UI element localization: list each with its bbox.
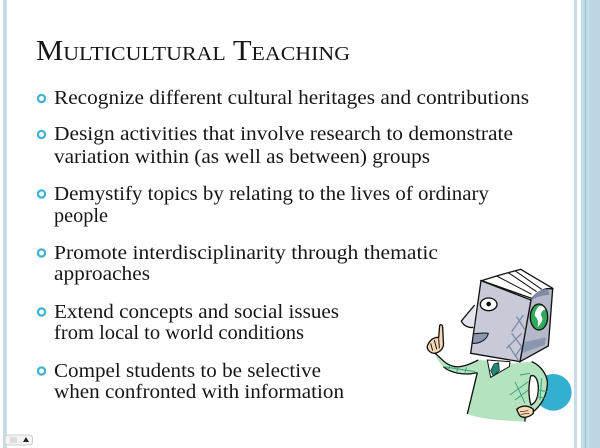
slide navigation control (5, 435, 32, 445)
mouth (472, 333, 488, 343)
pointing hand (427, 325, 444, 353)
hip hand (517, 406, 533, 417)
bullet 2 (38, 123, 513, 168)
bullet 5: Extend concepts and social issues (54, 301, 339, 323)
nose (461, 305, 475, 328)
eye (480, 298, 497, 311)
bullet 6: Compel students to be selective (54, 360, 321, 382)
bullet 5: from local to world conditions (54, 322, 304, 344)
globe (530, 304, 548, 330)
book face (471, 281, 531, 362)
illustration: book-headed teacher (427, 269, 572, 422)
collar and tie (487, 360, 510, 377)
sweater patches (443, 365, 547, 403)
bullet 2: Design activities that involve research to demonstrate (54, 123, 513, 145)
bullet list (38, 87, 529, 403)
bullet 6: when confronted with information (54, 381, 344, 403)
sweater (435, 353, 547, 422)
bullet 3: Demystify topics by relating to the lives of ordinary (54, 183, 490, 205)
bullet 6 (38, 360, 344, 403)
book pages (482, 269, 553, 298)
bullet 3: people (54, 205, 108, 227)
bullet 4 (38, 242, 438, 285)
teal circle (535, 374, 572, 411)
bullet 1: Recognize different cultural heritages and contributions (54, 87, 529, 109)
face patches (507, 315, 525, 360)
bullet 3 (38, 183, 490, 227)
book spine (520, 289, 553, 362)
bullet 4: approaches (54, 263, 150, 285)
bullet 4: Promote interdisciplinarity through thematic (54, 242, 438, 264)
arm gap (529, 376, 538, 405)
title: Multicultural Teaching (36, 36, 350, 67)
bullet 2: variation within (as well as between) groups (54, 146, 430, 168)
bullet 5 (38, 301, 339, 344)
